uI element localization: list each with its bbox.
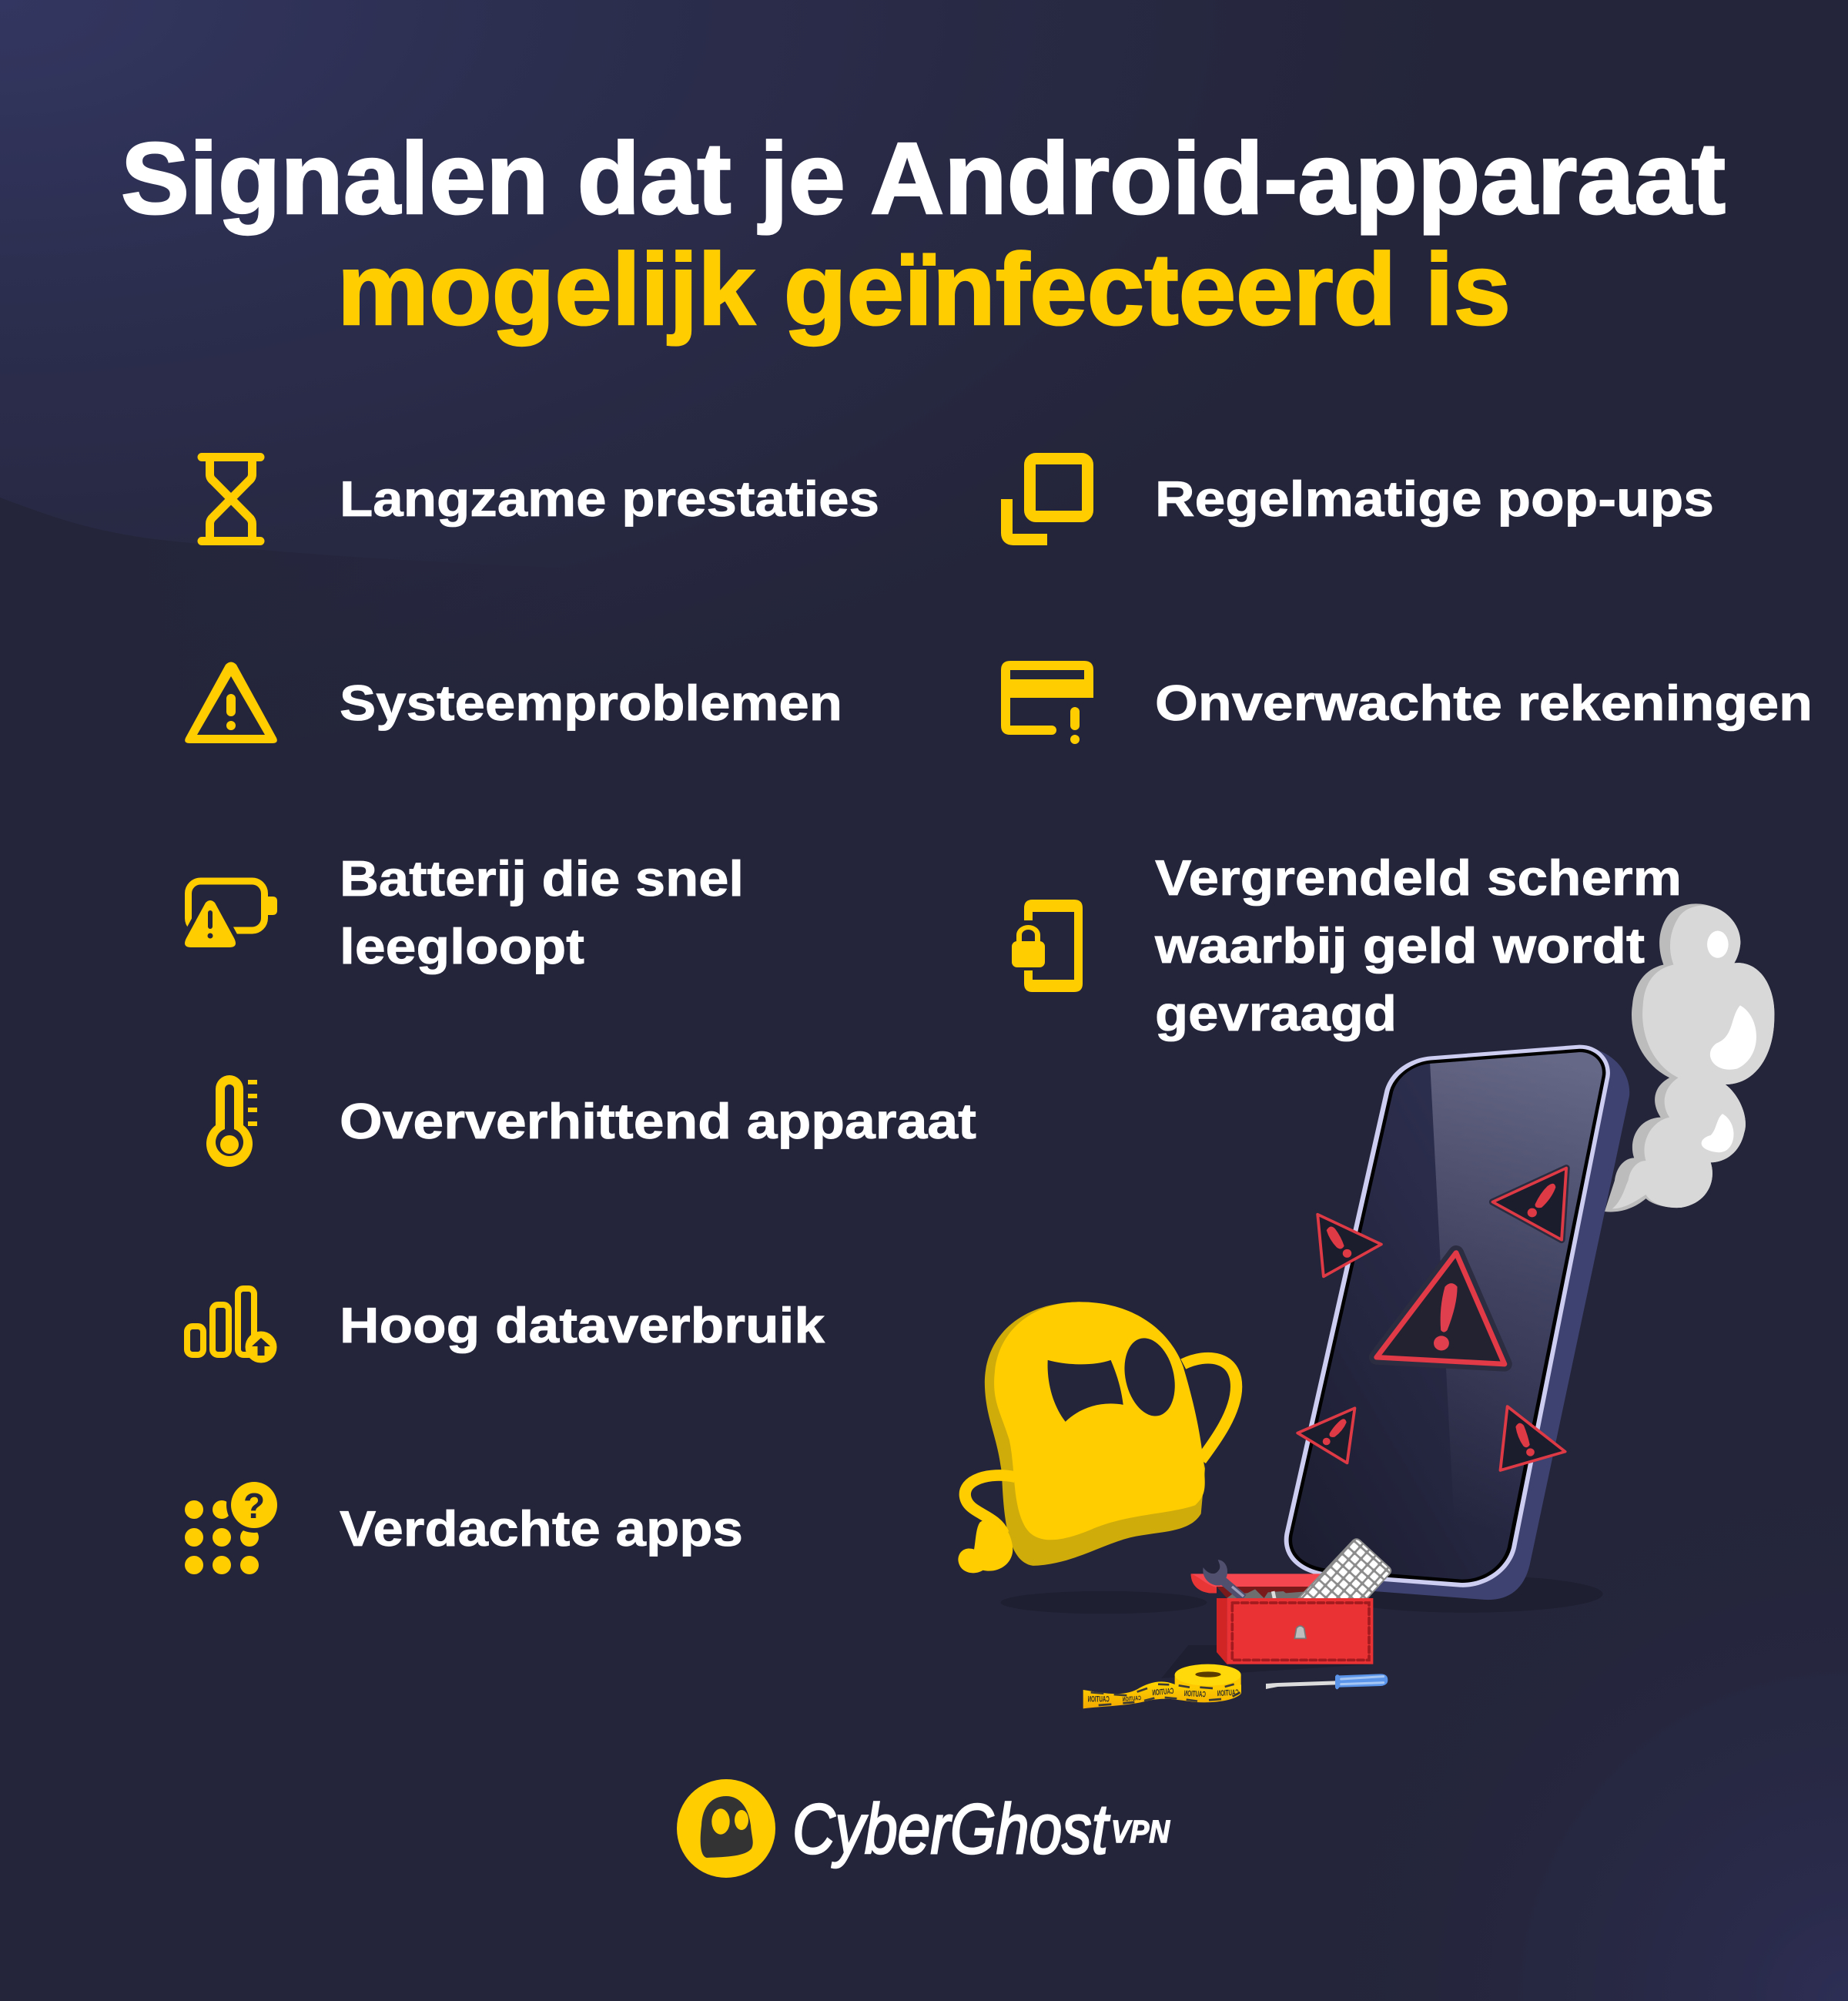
icon: bars with upload arrow — [187, 1289, 277, 1363]
toolbox — [1191, 1539, 1391, 1664]
label: Onverwachte rekeningen — [1155, 675, 1813, 731]
item: locked screen — [1012, 850, 1682, 1041]
item: high data usage — [187, 1289, 825, 1363]
label: Verdachte apps — [340, 1500, 743, 1557]
label — [340, 850, 744, 974]
item: overheating — [206, 1075, 976, 1167]
label: Regelmatige pop-ups — [1155, 471, 1714, 527]
title — [121, 122, 1726, 346]
label: waarbij geld wordt — [1154, 917, 1645, 974]
icon: hourglass — [202, 458, 260, 541]
right column list — [1001, 459, 1813, 1041]
item: frequent pop-ups — [1007, 459, 1714, 539]
icon: app grid with question mark: ? — [243, 1486, 265, 1526]
icon: warning triangle — [185, 662, 277, 743]
logo wordmark: CyberGhost — [792, 1790, 1110, 1869]
illustration: toolbox, tape and screwdriver — [1083, 1539, 1391, 1708]
title line 1: Signalen dat je Android-apparaat — [121, 122, 1726, 235]
logo badge — [677, 1779, 775, 1878]
label: leegloopt — [340, 918, 584, 974]
icon: phone with padlock — [1012, 900, 1083, 992]
icon: credit card alert — [1001, 661, 1093, 744]
warning: top right — [1493, 1168, 1566, 1240]
screwdriver — [1266, 1674, 1388, 1689]
label: Batterij die snel — [340, 850, 744, 907]
ghost mascot — [958, 1302, 1237, 1573]
ground shadows — [1000, 1575, 1603, 1614]
icon: overlapping windows — [1007, 459, 1087, 539]
label: Systeemproblemen — [340, 675, 842, 731]
item: system problems — [185, 662, 842, 743]
warning: upper left — [1317, 1215, 1381, 1276]
wrench — [1203, 1560, 1244, 1598]
caution tape: CAUTION — [1183, 1688, 1206, 1699]
caution tape: CAUTION — [1122, 1695, 1141, 1703]
warning: centre — [1377, 1253, 1505, 1364]
warning: lower right — [1500, 1406, 1565, 1470]
keyboard — [1298, 1538, 1392, 1598]
left column list — [185, 458, 976, 1574]
item: unexpected bills — [1001, 661, 1813, 744]
caution tape — [1083, 1664, 1241, 1708]
item: battery drain — [185, 850, 744, 974]
floor shadow — [1161, 1645, 1373, 1678]
illustration: infected phone scene — [958, 903, 1774, 1614]
caution tape: CAUTION — [1217, 1688, 1239, 1698]
icon: app grid with question mark — [185, 1477, 282, 1574]
phone — [1284, 1045, 1629, 1600]
warning: lower left — [1297, 1408, 1354, 1463]
label: Vergrendeld scherm — [1155, 850, 1682, 906]
label: gevraagd — [1155, 985, 1397, 1041]
item: suspicious apps — [185, 1477, 743, 1574]
icon: thermometer — [206, 1075, 257, 1167]
item: slow performance — [202, 458, 879, 541]
logo VPN: VPN — [1111, 1814, 1170, 1849]
label: Langzame prestaties — [340, 471, 879, 527]
label: Hoog dataverbruik — [340, 1297, 825, 1353]
icon: battery warning — [185, 881, 277, 947]
label — [1154, 850, 1682, 1041]
caution tape: CAUTION — [1088, 1694, 1110, 1704]
smoke — [1605, 903, 1774, 1212]
title line 2: mogelijk geïnfecteerd is — [337, 233, 1511, 346]
caution tape: CAUTION — [1152, 1686, 1174, 1698]
label: Oververhittend apparaat — [340, 1093, 976, 1149]
logo: CyberGhost VPN — [677, 1779, 1170, 1878]
